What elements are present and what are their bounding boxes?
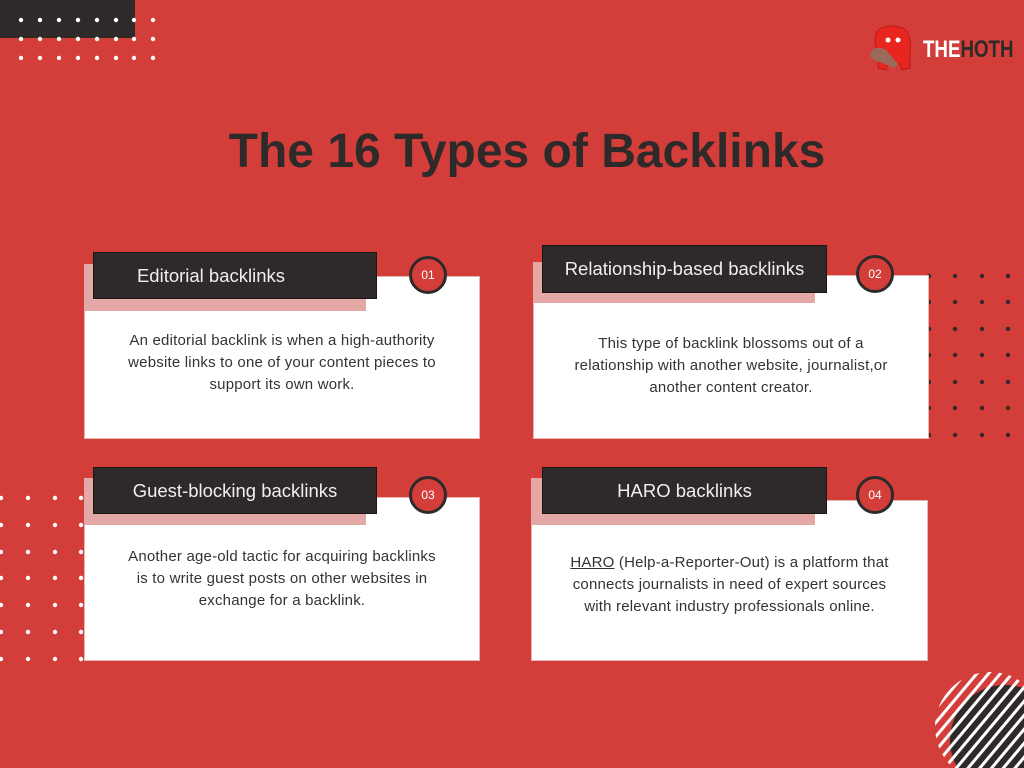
text: another content creator.	[649, 379, 813, 396]
heading: HARO backlinks	[617, 480, 752, 500]
text	[574, 335, 888, 396]
text: connects journalists in need of expert sources	[573, 576, 886, 593]
number badge: 03	[421, 488, 435, 502]
decoration: left dots	[0, 496, 84, 662]
icon: monster mascot	[870, 26, 911, 70]
text	[128, 548, 436, 609]
decoration: right dots	[927, 274, 1010, 438]
heading	[542, 467, 827, 514]
number badge: 01	[421, 268, 435, 282]
number badge	[856, 255, 894, 293]
text	[128, 332, 436, 393]
panel: 04 HARO backlinks	[531, 467, 928, 661]
heading: Guest-blocking backlinks	[133, 480, 337, 500]
text: This type of backlink blossoms out of a	[598, 335, 864, 352]
decoration: striped circle bottom right	[935, 672, 1024, 768]
text: An editorial backlink is when a high-authority	[129, 332, 435, 349]
panel: 03 Guest-blocking backlinks	[84, 467, 480, 661]
panel: 02 Relationship-based backlinks	[533, 245, 929, 439]
text: website links to one of your content pieces to	[128, 354, 436, 371]
number badge: 02	[868, 267, 882, 281]
decoration: top-left dark block with dots	[0, 0, 156, 60]
text: relationship with another website, journalist,or	[574, 357, 888, 374]
heading	[542, 245, 827, 293]
number badge	[409, 256, 447, 294]
logo: The Hoth: THEHOTH	[923, 36, 1013, 63]
title: The 16 Types of Backlinks	[229, 125, 825, 178]
number badge: 04	[868, 488, 882, 502]
text: HARO (Help-a-Reporter-Out) is a platform that	[570, 554, 889, 571]
logo: The Hoth	[870, 26, 1013, 70]
heading: Relationship-based backlinks	[565, 258, 804, 279]
panel: 01 Editorial backlinks	[84, 252, 480, 439]
heading	[93, 467, 377, 514]
text	[570, 554, 889, 615]
number badge	[856, 476, 894, 514]
text: with relevant industry professionals online.	[584, 598, 875, 615]
text: exchange for a backlink.	[199, 592, 365, 609]
text: is to write guest posts on other websites in	[137, 570, 427, 587]
text: support its own work.	[209, 376, 355, 393]
heading: Editorial backlinks	[137, 264, 285, 286]
number badge	[409, 476, 447, 514]
text: Another age-old tactic for acquiring backlinks	[128, 548, 436, 565]
heading	[93, 252, 377, 299]
